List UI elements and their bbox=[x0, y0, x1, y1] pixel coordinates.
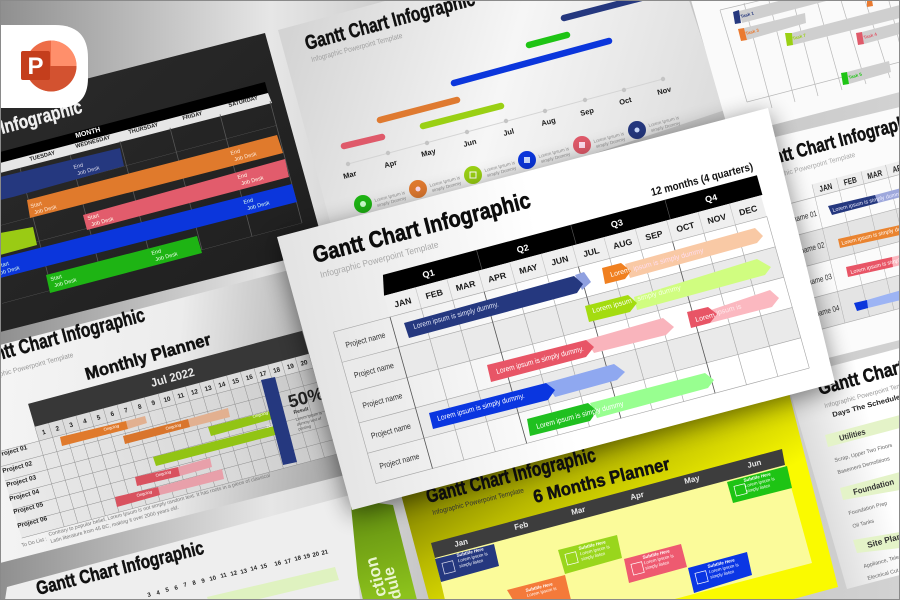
gantt bar: lime: Lorem ipsum bbox=[592, 298, 633, 315]
foundation items bbox=[848, 501, 888, 530]
calendar bar: green bbox=[46, 236, 202, 293]
weekday row: SATURDAY bbox=[228, 95, 259, 109]
planner bars: Done bbox=[266, 421, 278, 429]
task 5: Task 5 bbox=[848, 71, 863, 80]
planner table bbox=[0, 316, 393, 538]
planner header bar: May bbox=[683, 473, 701, 486]
duration note: 12 months (4 quarters) bbox=[650, 161, 755, 199]
gantt bar: lime: simply dummy bbox=[637, 284, 682, 303]
gantt bar: orange bbox=[602, 228, 763, 284]
day numbers row bbox=[147, 549, 330, 599]
quarter header bbox=[379, 175, 762, 296]
planner bars: Ongoing bbox=[155, 469, 172, 478]
foundation items: Oil Tanks bbox=[852, 518, 875, 530]
quarter header: Q1 bbox=[421, 267, 436, 280]
project names: Project name bbox=[361, 390, 404, 410]
planner header bar: Mar bbox=[570, 505, 586, 517]
grid body bbox=[0, 353, 393, 538]
project labels: Project 05 bbox=[13, 501, 44, 516]
block: green: simply listen bbox=[746, 483, 771, 494]
table grid bbox=[766, 152, 900, 335]
weekday row: FRIDAY bbox=[182, 111, 203, 122]
project labels: Project 06 bbox=[17, 515, 48, 530]
gantt bar: orange: ipsum is simply dummy bbox=[633, 247, 705, 273]
task 2 bbox=[738, 13, 806, 41]
table grid: FEB bbox=[843, 174, 858, 188]
day numbers: 16 bbox=[245, 374, 254, 382]
block: orange: Subtitle Here bbox=[525, 581, 554, 593]
day numbers row: 11 bbox=[220, 572, 228, 580]
calendar bar: orange: Job Desk bbox=[234, 151, 258, 163]
table grid: Project name 03 bbox=[786, 271, 833, 293]
month header: MAY bbox=[518, 262, 539, 276]
weekday row: TUESDAY bbox=[29, 150, 56, 163]
calendar bar: navy: End bbox=[73, 163, 84, 171]
main title: Gantt Chart Infographic bbox=[310, 187, 533, 268]
panel: dark calendar slide: MONTH bbox=[75, 127, 101, 140]
day numbers: 5 bbox=[96, 414, 102, 422]
panel: bottom left slide bbox=[5, 495, 360, 600]
site planning items: Electrical Cut bbox=[867, 568, 900, 582]
planner bars: Ongoing bbox=[103, 423, 120, 432]
calendar bar: orange: Job Desk bbox=[34, 204, 58, 216]
block: lime bbox=[558, 535, 622, 574]
project labels: Project 03 bbox=[6, 474, 37, 489]
calendar grid bbox=[0, 101, 302, 303]
yellow slide subtitle: Infographic Powerpoint Template bbox=[432, 487, 525, 517]
gantt bar: pink short: ipsum is bbox=[716, 303, 743, 317]
shaded rows bbox=[342, 247, 784, 393]
bottom slide title: Gantt Chart Infographic bbox=[34, 538, 206, 600]
project labels: Project 02 bbox=[2, 460, 33, 475]
day numbers row: 20 bbox=[312, 551, 321, 559]
task 1 bbox=[733, 0, 830, 24]
light green bar bbox=[207, 567, 339, 600]
day numbers: 19 bbox=[286, 363, 295, 371]
timeline legend icons: simply Dummy bbox=[650, 120, 681, 133]
day numbers: 20 bbox=[300, 359, 309, 368]
calendar bar: green: Job Desk bbox=[155, 251, 179, 263]
timeline legend icons: Lorem Ipsum is bbox=[429, 175, 461, 188]
panel: main gantt chart slide bbox=[277, 108, 835, 510]
day numbers: 14 bbox=[218, 381, 227, 390]
day numbers row: 13 bbox=[240, 568, 249, 576]
project labels bbox=[0, 444, 48, 530]
calendar bar: orange: End bbox=[230, 149, 241, 157]
task top marker bbox=[867, 0, 873, 7]
panel: middle right slide bbox=[750, 107, 900, 365]
block: navy: simply listen bbox=[459, 558, 484, 569]
panel: monthly planner slide bbox=[0, 268, 393, 563]
planner cream grid bbox=[435, 465, 812, 600]
day numbers: 15 bbox=[231, 377, 241, 386]
month header: APR bbox=[487, 270, 508, 284]
calendar bar: pink: Job Desk bbox=[241, 175, 265, 187]
panel: top right task slide bbox=[691, 0, 900, 136]
month header: JUL bbox=[582, 245, 601, 259]
planner bars: Ongoing bbox=[165, 422, 182, 431]
day numbers row: 21 bbox=[321, 549, 330, 557]
band: site planning bbox=[853, 527, 900, 553]
block: blue bbox=[688, 552, 752, 593]
planner header bar: Jan bbox=[453, 537, 469, 549]
month header: MAR bbox=[455, 278, 477, 293]
calendar bar: pink bbox=[83, 159, 289, 230]
to do list: Latin literature from 45 BC, making it over 2000 years old. bbox=[50, 505, 180, 545]
icon: PowerPoint app badge: P bbox=[27, 53, 44, 80]
planner heading: 6 Months Planner bbox=[531, 454, 672, 507]
month header: NOV bbox=[706, 211, 728, 226]
gantt bar: orange: Lorem bbox=[610, 267, 631, 279]
day numbers row: 18 bbox=[294, 555, 303, 563]
gantt bar: red bbox=[487, 318, 674, 382]
timeline legend icons: Lorem Ipsum is bbox=[538, 146, 570, 159]
band: foundation bbox=[840, 472, 900, 500]
block: orange bbox=[507, 575, 571, 600]
planner bars bbox=[60, 408, 283, 507]
timeline legend icons: simply Dummy bbox=[540, 151, 571, 164]
calendar bar: navy bbox=[0, 148, 124, 200]
result percentage: Lorem ipsum is bbox=[295, 410, 322, 422]
day numbers row: 12 bbox=[230, 570, 239, 578]
calendar bar: green: End bbox=[151, 249, 162, 257]
day numbers: 17 bbox=[259, 370, 268, 379]
calendar bar: blue: Job Desk bbox=[247, 200, 271, 212]
calendar bar: lime bbox=[0, 227, 37, 255]
project names: Project name bbox=[344, 330, 387, 350]
to do list: Contrary to popular belief, Lorem Ipsum is not simply random text. It has roots in a piece of classical bbox=[48, 473, 271, 538]
timeline legend icons: Lorem Ipsum is bbox=[593, 131, 625, 144]
block: navy: Subtitle Here bbox=[456, 546, 485, 558]
month header: AUG bbox=[612, 236, 634, 251]
timeline axis with month dots: May bbox=[420, 146, 437, 159]
timeline legend icons: Lorem Ipsum is bbox=[374, 190, 406, 203]
panel: bottom right schedule slide bbox=[786, 348, 900, 589]
calendar bar: blue: End bbox=[243, 198, 254, 206]
timeline axis with month dots: Apr bbox=[383, 158, 398, 170]
gantt bar: blue: Lorem ipsum is simply dummy. bbox=[436, 391, 525, 423]
result percentage: printing bbox=[298, 423, 312, 432]
month header: JAN bbox=[393, 295, 413, 309]
month header: JUN bbox=[550, 254, 570, 268]
timeline axis with month dots: Mar bbox=[342, 169, 357, 181]
panel: top timeline slide bbox=[278, 0, 725, 240]
table bars bbox=[828, 187, 900, 311]
task 1: Task 1 bbox=[740, 10, 755, 19]
day numbers row: 7 bbox=[183, 582, 188, 589]
month header bbox=[384, 195, 767, 317]
gantt bar: green: Lorem ipsum is simply dummy bbox=[535, 399, 625, 431]
block: blue: simply listen bbox=[710, 569, 735, 580]
gantt bar: pink short bbox=[687, 290, 779, 328]
day numbers: 11 bbox=[177, 392, 186, 400]
day numbers row: 4 bbox=[156, 590, 161, 597]
calendar bar: blue bbox=[0, 184, 297, 278]
day numbers row: 17 bbox=[284, 558, 293, 566]
calendar bar: navy: Job Desk bbox=[77, 165, 101, 177]
schedule heading: Days The Schedule bbox=[832, 394, 900, 419]
task 4 bbox=[856, 22, 900, 45]
block: blue: Lorem ipsum is bbox=[708, 562, 740, 574]
to do list: To Do List : bbox=[21, 536, 48, 549]
timeline axis with month dots: Oct bbox=[618, 95, 633, 107]
band: utilities: Utilities bbox=[838, 427, 867, 443]
navy result column bbox=[261, 377, 297, 465]
block: navy bbox=[435, 544, 499, 582]
task 3 bbox=[785, 5, 900, 46]
project names bbox=[344, 330, 421, 471]
quarter header: Q2 bbox=[515, 242, 530, 255]
project names: Project name bbox=[353, 360, 395, 380]
calendar bar: pink: Start bbox=[87, 213, 100, 222]
calendar bar: pink: End bbox=[237, 173, 248, 181]
utilities items bbox=[834, 443, 893, 476]
gantt bar: blue bbox=[429, 364, 625, 429]
timeline axis with month dots: Jun bbox=[462, 137, 478, 149]
day numbers row: 6 bbox=[174, 585, 179, 592]
month bar bbox=[28, 331, 309, 427]
planner header bar: Feb bbox=[513, 520, 529, 532]
utilities items: Basement Demolitions bbox=[837, 456, 891, 476]
day numbers: 12 bbox=[190, 388, 199, 397]
timeline subtitle: Infographic Powerpoint Template bbox=[310, 31, 403, 64]
gantt bar: green bbox=[527, 373, 714, 436]
grid lines bbox=[333, 217, 809, 484]
weekday row: WEDNESDAY bbox=[75, 135, 111, 150]
planner header bar: Apr bbox=[629, 490, 645, 502]
month header: SEP bbox=[644, 228, 664, 242]
day numbers row: 15 bbox=[260, 563, 269, 571]
table grid: Project name 01 bbox=[771, 208, 818, 230]
day numbers: 1 bbox=[41, 429, 47, 437]
month bar: Jul 2022 bbox=[149, 366, 196, 390]
timeline legend icons: simply Dummy bbox=[486, 165, 517, 178]
timeline axis with month dots: Nov bbox=[656, 84, 673, 97]
quarter header: Q4 bbox=[704, 192, 718, 205]
planner header bar: Jun bbox=[746, 458, 762, 470]
band: utilities bbox=[825, 415, 900, 447]
calendar bar: orange bbox=[27, 135, 283, 218]
block: lime: simply listen bbox=[581, 551, 606, 562]
weekday row bbox=[0, 93, 272, 173]
month header: DEC bbox=[738, 203, 758, 217]
day numbers: 9 bbox=[151, 399, 157, 407]
block: pink: Lorem ipsum is bbox=[643, 553, 675, 565]
day numbers: 8 bbox=[137, 403, 143, 411]
site planning items bbox=[863, 552, 900, 582]
task grid bbox=[720, 0, 900, 108]
day numbers: 4 bbox=[82, 418, 88, 426]
slide subtitle: Infographic Powerpoint Template bbox=[760, 152, 856, 184]
vertical heading: ction bbox=[362, 555, 390, 599]
gantt bar: navy: Lorem ipsum is simply dummy. bbox=[412, 299, 500, 331]
timeline axis with month dots: Jul bbox=[502, 126, 515, 138]
calendar bar: green: Start bbox=[50, 274, 63, 283]
result percentage: Result bbox=[293, 406, 310, 416]
timeline legend icons: Lorem Ipsum is bbox=[484, 160, 516, 173]
main subtitle: Infographic Powerpoint Template bbox=[319, 239, 440, 280]
day numbers: 10 bbox=[163, 395, 172, 404]
day numbers: 18 bbox=[272, 366, 282, 375]
timeline legend icons: Lorem Ipsum is bbox=[648, 115, 680, 128]
planner bars: Ongoing bbox=[252, 410, 269, 419]
planner bars: Ongoing bbox=[136, 489, 153, 498]
gantt bar: lime bbox=[585, 259, 771, 322]
panel: dark calendar slide bbox=[0, 33, 325, 332]
block: orange: Lorem ipsum is bbox=[526, 586, 558, 598]
band: foundation: Foundation bbox=[852, 476, 895, 497]
quarter header: Q3 bbox=[610, 217, 624, 230]
icon: PowerPoint app badge bbox=[0, 25, 88, 108]
day numbers row: 3 bbox=[147, 592, 152, 599]
yellow slide title: Gantt Chart Infographic bbox=[424, 444, 598, 508]
day numbers row: 10 bbox=[209, 575, 218, 583]
block: lime: Lorem ipsum is bbox=[579, 544, 611, 556]
block: green: Subtitle Here bbox=[743, 471, 772, 483]
day numbers row: 8 bbox=[192, 580, 197, 587]
project labels: Project 04 bbox=[9, 488, 40, 503]
block: lime: Subtitle Here bbox=[578, 539, 607, 551]
day numbers: 6 bbox=[110, 410, 116, 418]
table grid: MAR bbox=[866, 168, 884, 181]
calendar bar: orange: Start bbox=[30, 201, 43, 210]
foundation items: Foundation Prep bbox=[848, 501, 888, 517]
block: navy: Lorem ipsum is bbox=[457, 551, 489, 563]
task 2: Task 3 bbox=[745, 27, 760, 36]
block: pink: simply listen bbox=[645, 560, 670, 571]
month header: FEB bbox=[424, 287, 444, 301]
block: blue: Subtitle Here bbox=[707, 557, 736, 569]
timeline legend icons: simply Dummy bbox=[376, 195, 407, 208]
timeline axis with month dots: Aug bbox=[540, 115, 557, 128]
timeline axis with month dots bbox=[342, 77, 673, 181]
gantt bar: pink short: Lorem bbox=[695, 312, 716, 324]
day numbers row: 19 bbox=[303, 553, 312, 561]
block: pink: Subtitle Here bbox=[642, 548, 671, 560]
day numbers row: 14 bbox=[250, 565, 259, 573]
gantt bar: navy bbox=[404, 272, 591, 338]
month header: OCT bbox=[675, 220, 696, 234]
timeline legend icons: simply Dummy bbox=[431, 180, 462, 193]
calendar bar: pink: Job Desk bbox=[91, 216, 115, 228]
day numbers: 3 bbox=[69, 421, 74, 429]
planner header bar bbox=[431, 449, 785, 558]
panel: green construction schedule slide bbox=[340, 498, 417, 600]
day numbers row: 9 bbox=[201, 578, 206, 585]
result percentage bbox=[286, 383, 326, 432]
block: green bbox=[727, 466, 792, 503]
day numbers: 13 bbox=[204, 384, 213, 393]
task 3: Task 7 bbox=[792, 32, 807, 41]
gantt table bbox=[322, 175, 811, 484]
main slide shadow bbox=[277, 113, 835, 515]
block: green: Lorem ipsum is bbox=[744, 476, 776, 488]
result percentage: dummy text of bbox=[296, 415, 323, 427]
day numbers row: 16 bbox=[274, 560, 283, 568]
table grid: JAN bbox=[818, 181, 833, 194]
gantt bar: red: Lorem ipsum is simply dummy. bbox=[495, 344, 584, 376]
table grid: Project name 04 bbox=[794, 303, 840, 324]
block: pink bbox=[624, 544, 687, 583]
panel: yellow six month planner slide bbox=[398, 385, 838, 600]
timeline axis with month dots: Sep bbox=[579, 106, 595, 118]
task 5 bbox=[841, 61, 891, 85]
result percentage: 50% bbox=[286, 383, 326, 412]
table grid: Project name 02 bbox=[779, 240, 825, 261]
calendar bar: green: Job Desk bbox=[54, 277, 78, 289]
timeline legend icons bbox=[354, 115, 682, 213]
day numbers bbox=[41, 359, 309, 437]
utilities items: Scrap, Upper Two Floors bbox=[834, 443, 893, 464]
day numbers: 2 bbox=[55, 425, 61, 433]
day numbers: 7 bbox=[123, 407, 129, 415]
weekday row: THURSDAY bbox=[128, 122, 159, 136]
day numbers row: 5 bbox=[165, 587, 170, 594]
timeline bars bbox=[344, 0, 645, 146]
task 4: Task 4 bbox=[863, 31, 878, 40]
project names: Project name bbox=[370, 421, 412, 441]
calendar header band bbox=[0, 82, 268, 163]
dark slide title: Infographic bbox=[0, 97, 85, 139]
project names: Project name bbox=[378, 451, 421, 471]
timeline legend icons: simply Dummy bbox=[595, 136, 626, 149]
planner heading: Monthly Planner bbox=[83, 330, 213, 384]
